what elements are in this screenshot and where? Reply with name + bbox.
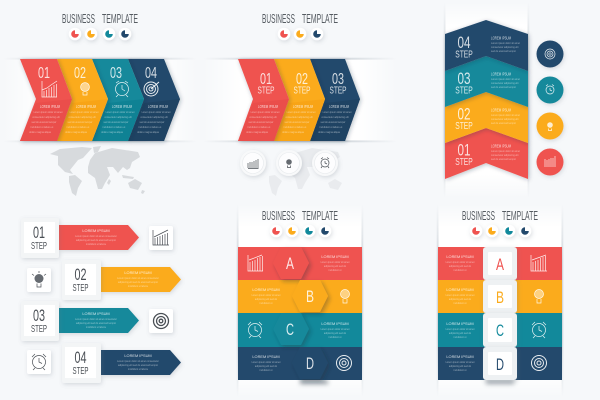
band A red: Lorem ipsum dolor sit amet <box>321 261 350 264</box>
icon: target <box>532 356 546 370</box>
chevron 01 red: sed do eiusmod tempor <box>32 121 57 124</box>
chevron 03 navy: consectetur adipiscing elit <box>321 116 349 119</box>
band D navy: LOREM IPSUM <box>446 354 474 359</box>
band D navy: incididunt ut <box>260 369 273 372</box>
step 04 row: incididunt ut labore <box>128 368 149 371</box>
band C teal: adipiscing elit sed do <box>449 332 472 335</box>
band B orange <box>438 280 562 313</box>
icon: alarm clock tile <box>27 350 51 374</box>
chevron 03 teal: Lorem ipsum dolor sit amet <box>106 111 135 114</box>
icon: alarm clock <box>248 322 262 338</box>
band C teal: adipiscing elit sed do <box>324 332 347 335</box>
step 03 row: STEP <box>31 323 47 335</box>
chevron 03 teal <box>445 56 528 107</box>
chevron 03 teal: LOREM IPSUM <box>112 104 132 109</box>
chevron 01 red: STEP <box>258 84 274 96</box>
chevron 04 navy: LOREM IPSUM <box>148 104 168 109</box>
heading: BUSINESS <box>62 12 95 26</box>
icon: bar chart badge <box>536 148 564 176</box>
band C teal: incididunt ut <box>454 336 467 339</box>
hexagon B: B <box>306 287 314 306</box>
step 02 row: LOREM IPSUM <box>124 270 152 275</box>
band D navy <box>438 347 562 380</box>
band A red: LOREM IPSUM <box>321 254 349 259</box>
icon: bar chart <box>42 81 57 97</box>
chevron 04 navy: 04 <box>458 34 470 52</box>
chevron 02 orange: STEP <box>455 120 473 132</box>
chevron 02 orange: Lorem ipsum dolor sit amet <box>287 111 316 114</box>
tile C <box>483 313 517 347</box>
band D navy: adipiscing elit sed do <box>255 365 278 368</box>
chevron 01 red: incididunt ut labore et <box>31 126 54 129</box>
chevron 04 navy: consectetur adipiscing elit <box>491 46 519 49</box>
chevron 01 red: dolore magna aliqua <box>29 131 51 134</box>
band C teal: Lorem ipsum dolor sit amet <box>446 328 475 331</box>
hexagon A <box>273 247 309 279</box>
step 02 row: 02 <box>74 266 86 284</box>
icon: light bulb tile <box>27 268 51 292</box>
chevron 02 orange: consectetur adipiscing elit <box>285 116 313 119</box>
panel: vertical chevron stack <box>444 2 564 198</box>
chevron 01 red: consectetur adipiscing elit <box>491 154 519 157</box>
heading: TEMPLATE <box>302 12 338 26</box>
band D navy: Lorem ipsum dolor sit amet <box>446 361 475 364</box>
hexagon D: D <box>306 354 314 373</box>
chevron 01 red <box>20 59 72 141</box>
band D navy: LOREM IPSUM <box>252 354 280 359</box>
chevron 03 teal: consectetur adipiscing elit <box>491 82 519 85</box>
icon: bar chart tile <box>149 226 173 250</box>
chevron 02 orange: STEP <box>294 84 310 96</box>
chevron 02 orange: 02 <box>458 106 470 124</box>
chevron 01 red: STEP <box>455 156 473 168</box>
icon: light bulb badge <box>536 112 564 140</box>
tile A: A <box>496 255 504 274</box>
panel: four-step horizontal chevrons <box>3 12 197 196</box>
heading: TEMPLATE <box>102 12 138 26</box>
chevron 01 red: Lorem ipsum dolor sit amet <box>491 150 520 153</box>
chevron 02 orange <box>274 59 325 141</box>
chevron 03 teal: incididunt ut labore et <box>103 126 126 129</box>
icon: bar chart <box>531 255 547 271</box>
chevron 03 teal: consectetur adipiscing elit <box>104 116 132 119</box>
band A red: Lorem ipsum dolor sit amet <box>446 261 475 264</box>
step 01 row: LOREM IPSUM <box>82 228 110 233</box>
icon: alarm clock <box>532 322 546 338</box>
heading: BUSINESS <box>462 209 495 223</box>
chevron 04 navy: incididunt ut labore et <box>139 126 162 129</box>
chevron 04 navy <box>128 59 180 141</box>
icon: bar chart badge <box>240 150 266 176</box>
chevron 03 navy: LOREM IPSUM <box>329 104 349 109</box>
chevron 01 red: 01 <box>38 65 50 82</box>
icon: target badge <box>536 40 564 68</box>
band C teal: Lorem ipsum dolor sit amet <box>321 328 350 331</box>
hexagon D <box>292 347 328 379</box>
step 04 row: Lorem ipsum dolor sit amet consectetur <box>117 360 159 363</box>
step 01 row: 01 <box>33 224 45 242</box>
chevron 01 red: LOREM IPSUM <box>258 104 278 109</box>
chevron 02 orange: LOREM IPSUM <box>293 104 313 109</box>
step 04 row: STEP <box>72 365 88 377</box>
band D navy: Lorem ipsum dolor sit amet <box>252 361 281 364</box>
step 04 row: adipiscing elit sed do eiusmod tempor <box>118 364 158 367</box>
chevron 01 red <box>238 59 289 141</box>
chevron 01 red: sed do eiusmod tempor <box>491 158 516 161</box>
step 01 row: Lorem ipsum dolor sit amet consectetur <box>75 235 117 238</box>
step 02 row: adipiscing elit sed do eiusmod tempor <box>118 281 158 284</box>
chevron 04 navy: LOREM IPSUM <box>491 36 511 40</box>
colour dots legend <box>69 28 131 40</box>
chevron 01 red: 01 <box>458 142 470 160</box>
chevron 02 orange: sed do eiusmod tempor <box>491 122 516 125</box>
chevron 03 navy: 03 <box>332 71 344 88</box>
icon: alarm clock badge <box>536 76 564 104</box>
chevron 02 orange <box>57 59 108 141</box>
tile B: B <box>496 288 504 307</box>
chevron 03 navy <box>310 59 360 141</box>
icon: alarm clock badge <box>312 150 338 176</box>
band A red: adipiscing elit sed do <box>324 265 347 268</box>
icon: light bulb <box>340 290 350 303</box>
band C teal: LOREM IPSUM <box>321 321 349 326</box>
chevron band background <box>203 58 397 142</box>
step 02 row: incididunt ut labore <box>128 285 149 288</box>
chevron 02 orange: sed do eiusmod tempor <box>68 121 93 124</box>
chevron 01 red: consectetur adipiscing elit <box>32 116 60 119</box>
shadow under sheet bands <box>486 380 514 384</box>
panel: three-step horizontal chevrons <box>203 12 397 196</box>
chevron 04 navy: Lorem ipsum dolor sit amet <box>142 111 171 114</box>
chevron 03 teal <box>92 59 144 141</box>
icon: light bulb <box>81 83 89 95</box>
chevron 03 navy: STEP <box>330 84 346 96</box>
step 02 row: STEP <box>72 282 88 294</box>
panel: hexagon bands <box>237 204 363 397</box>
chevron 03 teal: LOREM IPSUM <box>491 72 511 76</box>
band D navy: incididunt ut <box>454 369 467 372</box>
band A red: incididunt ut <box>329 269 342 272</box>
band B orange: Lorem ipsum dolor sit amet <box>252 294 281 297</box>
icon: target <box>144 82 159 96</box>
vertical white strip <box>444 2 529 198</box>
panel: lettered tile bands <box>437 204 563 397</box>
band A red: adipiscing elit sed do <box>449 265 472 268</box>
tile C: C <box>496 321 504 340</box>
chevron 03 navy: dolore magna aliqua <box>318 131 340 134</box>
band B orange: Lorem ipsum dolor sit amet <box>446 294 475 297</box>
band B orange: LOREM IPSUM <box>446 287 474 292</box>
tile B <box>483 280 517 313</box>
icon: alarm clock <box>116 81 128 97</box>
band A red: incididunt ut <box>454 269 467 272</box>
band B orange: incididunt ut <box>260 302 273 305</box>
panel: stepped arrow list <box>21 218 181 383</box>
band A red: LOREM IPSUM <box>446 254 474 259</box>
band C teal <box>438 313 562 347</box>
heading: BUSINESS <box>262 209 295 223</box>
chevron 04 navy: 04 <box>145 65 157 82</box>
step 03 row: 03 <box>33 307 45 325</box>
chevron 03 navy: Lorem ipsum dolor sit amet <box>323 111 352 114</box>
icon: target <box>336 356 352 370</box>
chevron 03 teal: 03 <box>458 70 470 88</box>
step 03 row: incididunt ut labore <box>86 326 107 329</box>
band D navy <box>238 347 362 380</box>
chevron 04 navy <box>445 20 528 71</box>
heading: TEMPLATE <box>502 209 538 223</box>
chevron 02 orange: 02 <box>296 71 308 88</box>
colour dots legend <box>470 225 531 237</box>
chevron 02 orange: LOREM IPSUM <box>76 104 96 109</box>
chevron 04 navy: consectetur adipiscing elit <box>140 116 168 119</box>
icon: light bulb <box>534 290 544 303</box>
chevron band background <box>3 58 197 142</box>
hexagon C: C <box>286 320 294 339</box>
chevron 03 teal: sed do eiusmod tempor <box>104 121 129 124</box>
step 01 row: STEP <box>31 240 47 252</box>
tile D: D <box>496 355 504 374</box>
chevron 04 navy: sed do eiusmod tempor <box>491 50 516 53</box>
chevron 02 orange: incididunt ut labore et <box>67 126 90 129</box>
step 02 row: Lorem ipsum dolor sit amet consectetur <box>117 277 159 280</box>
chevron 03 navy: incididunt ut labore et <box>320 126 343 129</box>
band C teal: incididunt ut <box>329 336 342 339</box>
chevron 02 orange: incididunt ut labore et <box>284 126 307 129</box>
hexagon A: A <box>286 254 294 273</box>
step 01 row <box>21 218 173 258</box>
chevron 01 red: Lorem ipsum dolor sit amet <box>34 111 63 114</box>
step 03 row: adipiscing elit sed do eiusmod tempor <box>76 322 116 325</box>
white sheet <box>237 204 363 397</box>
chevron 01 red <box>445 128 528 179</box>
colour dots legend <box>278 28 323 40</box>
step 03 row <box>21 301 173 341</box>
tile D <box>483 347 517 380</box>
chevron 03 teal: 03 <box>110 65 122 82</box>
faint world map <box>269 148 342 196</box>
step 03 row: LOREM IPSUM <box>82 311 110 316</box>
chevron 01 red: LOREM IPSUM <box>40 104 60 109</box>
chevron 02 orange: Lorem ipsum dolor sit amet <box>70 111 99 114</box>
chevron 02 orange <box>445 92 528 143</box>
chevron 03 teal: dolore magna aliqua <box>101 131 123 134</box>
tile A <box>483 247 517 280</box>
chevron 01 red: consectetur adipiscing elit <box>249 116 277 119</box>
chevron 02 orange: Lorem ipsum dolor sit amet <box>491 114 520 117</box>
step 04 row: 04 <box>74 349 86 367</box>
chevron 04 navy: STEP <box>455 48 473 60</box>
chevron 01 red: incididunt ut labore et <box>248 126 271 129</box>
chevron 04 navy: dolore magna aliqua <box>137 131 159 134</box>
chevron 01 red: Lorem ipsum dolor sit amet <box>251 111 280 114</box>
band B orange: adipiscing elit sed do <box>449 298 472 301</box>
chevron 04 navy: Lorem ipsum dolor sit amet <box>491 42 520 45</box>
heading: BUSINESS <box>262 12 295 26</box>
chevron 03 teal: Lorem ipsum dolor sit amet <box>491 78 520 81</box>
chevron 01 red: 01 <box>260 71 272 88</box>
shadow under sheet bands <box>300 380 328 384</box>
chevron 01 red: LOREM IPSUM <box>491 144 511 148</box>
band C teal <box>238 313 362 347</box>
chevron 02 orange: dolore magna aliqua <box>282 131 304 134</box>
hexagon C <box>273 313 309 345</box>
chevron 03 teal: STEP <box>455 84 473 96</box>
band B orange: incididunt ut <box>454 302 467 305</box>
band C teal: LOREM IPSUM <box>446 321 474 326</box>
chevron 01 red: sed do eiusmod tempor <box>249 121 274 124</box>
hexagon B <box>292 280 328 312</box>
band B orange: LOREM IPSUM <box>252 287 280 292</box>
chevron 04 navy: sed do eiusmod tempor <box>140 121 165 124</box>
chevron 02 orange: 02 <box>74 65 86 82</box>
step 01 row: incididunt ut labore <box>86 243 107 246</box>
band A red <box>238 247 362 280</box>
band B orange: adipiscing elit sed do <box>255 298 278 301</box>
chevron 03 navy: sed do eiusmod tempor <box>321 121 346 124</box>
chevron 01 red: dolore magna aliqua <box>246 131 268 134</box>
chevron 02 orange: dolore magna aliqua <box>65 131 87 134</box>
chevron 02 orange: consectetur adipiscing elit <box>491 118 519 121</box>
step 03 row: Lorem ipsum dolor sit amet consectetur <box>75 318 117 321</box>
world map <box>50 146 145 196</box>
icon: target tile <box>149 309 173 333</box>
band A red <box>438 247 562 280</box>
band D navy: adipiscing elit sed do <box>449 365 472 368</box>
colour dots legend <box>270 225 331 237</box>
icon: bar chart <box>248 255 263 271</box>
chevron 03 teal: sed do eiusmod tempor <box>491 86 516 89</box>
band B orange <box>238 280 362 313</box>
white sheet <box>437 204 563 397</box>
heading: TEMPLATE <box>302 209 338 223</box>
step 01 row: adipiscing elit sed do eiusmod tempor <box>76 239 116 242</box>
chevron 02 orange: LOREM IPSUM <box>491 108 511 112</box>
step 04 row: LOREM IPSUM <box>124 353 152 358</box>
chevron 02 orange: consectetur adipiscing elit <box>68 116 96 119</box>
step 02 row <box>27 260 181 300</box>
step 04 row <box>27 343 181 383</box>
chevron 02 orange: sed do eiusmod tempor <box>285 121 310 124</box>
icon: light bulb badge <box>276 150 302 176</box>
